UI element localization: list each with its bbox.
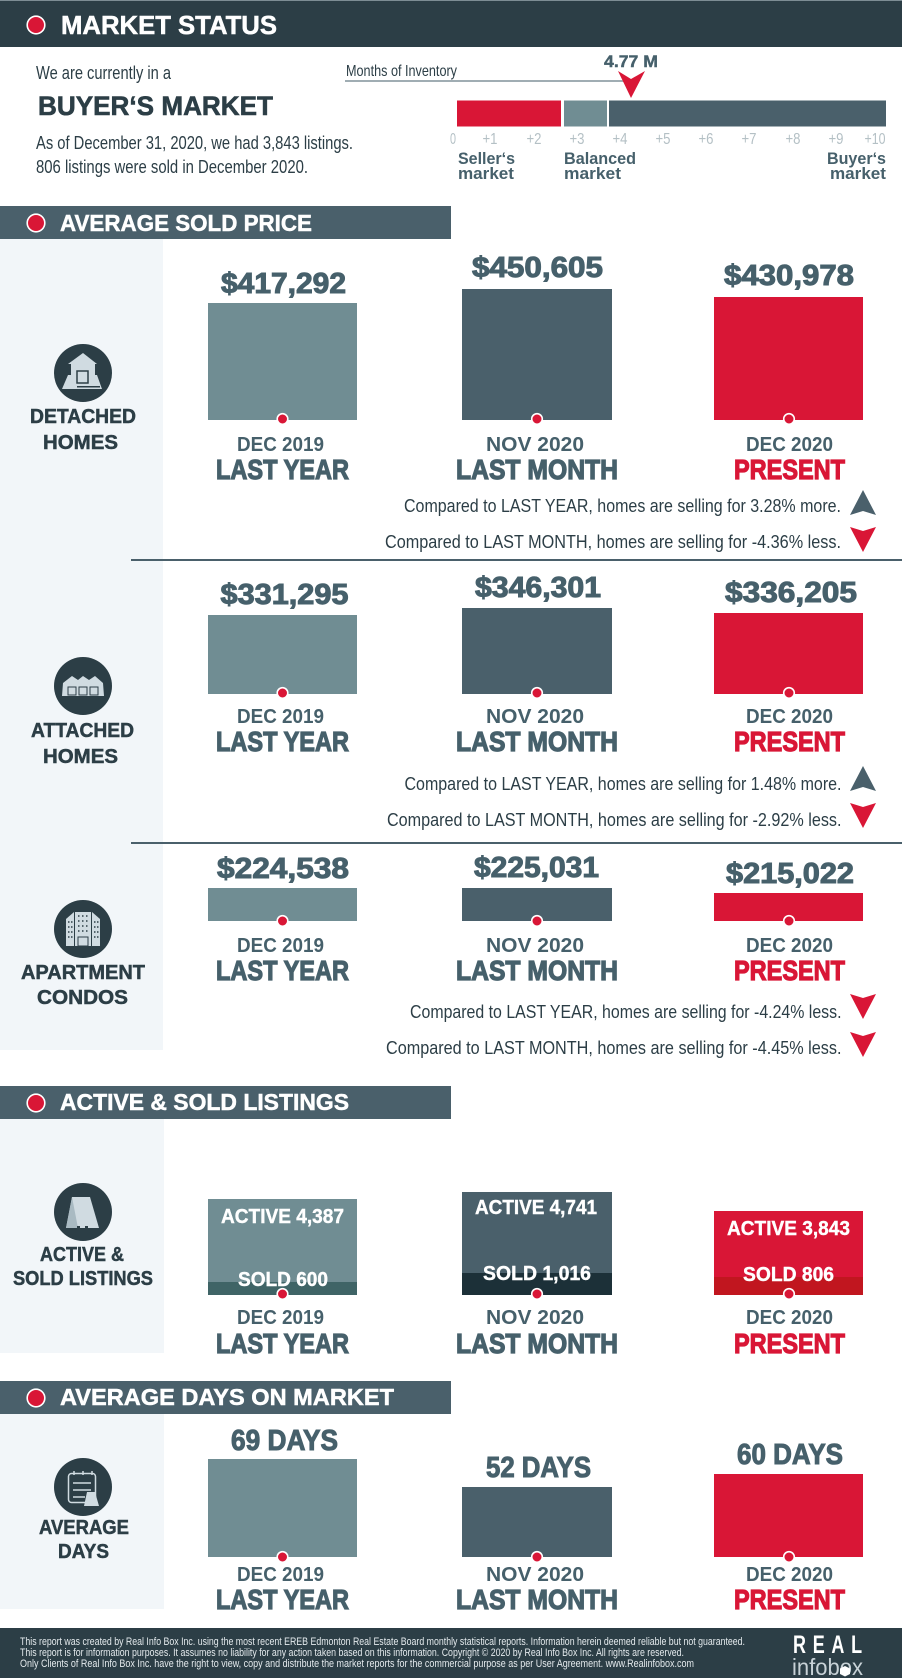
logo: real infobox bbox=[792, 1630, 863, 1680]
bar: apartment present bbox=[714, 858, 863, 986]
bar: listings present: PRESENT bbox=[734, 1328, 845, 1359]
text: disclaimer: Only Clients of Real Info Box Inc. have the right to view, copy and distribute the market reports for the commercial purpose as per User Agreement. www.Realinfobox.com bbox=[20, 1658, 694, 1670]
panel: active and sold listings bbox=[13, 1183, 863, 1359]
bar: listings last year bbox=[208, 1199, 357, 1359]
icon: sold sign bbox=[54, 1183, 112, 1241]
bar: attached last year bbox=[208, 579, 357, 757]
heading: average days on market: AVERAGE DAYS ON MARKET bbox=[60, 1384, 395, 1410]
bar: listings present: DEC 2020 bbox=[746, 1307, 833, 1329]
chart: months of inventory scale: +3 bbox=[570, 131, 584, 148]
label: active and sold listings bbox=[13, 1243, 153, 1290]
bar: listings last year: LAST YEAR bbox=[216, 1328, 349, 1359]
bar: days last year: DEC 2019 bbox=[237, 1564, 324, 1586]
bar: attached present: $336,205 bbox=[725, 577, 857, 609]
bar: attached present: PRESENT bbox=[734, 726, 845, 757]
text: market summary: 806 listings were sold in December 2020. bbox=[36, 157, 308, 177]
bar: detached last month bbox=[456, 252, 618, 485]
chart: months of inventory scale: market bbox=[458, 164, 514, 183]
chart: months of inventory scale: 4.77 M bbox=[604, 52, 658, 71]
bar: days last month: NOV 2020 bbox=[486, 1564, 584, 1586]
bar: apartment last year bbox=[208, 853, 357, 986]
bar: listings last year: DEC 2019 bbox=[237, 1307, 324, 1329]
callout: apartment comparison to last month: Compared to LAST MONTH, homes are selling for -4.45% less. bbox=[386, 1037, 842, 1058]
bar: listings last month bbox=[456, 1192, 618, 1359]
chart: months of inventory scale: Months of Inventory bbox=[346, 63, 457, 80]
bar: attached last month: $346,301 bbox=[475, 572, 601, 604]
bar: days last year: LAST YEAR bbox=[216, 1584, 349, 1615]
bar: apartment last month: LAST MONTH bbox=[456, 955, 618, 986]
bar: attached present bbox=[714, 577, 863, 757]
bar: apartment last year: $224,538 bbox=[217, 853, 349, 885]
panel: left column, days on market bbox=[0, 1414, 164, 1609]
text: disclaimer bbox=[20, 1636, 745, 1670]
panel: detached homes bbox=[30, 252, 876, 552]
bar: days last year bbox=[208, 1425, 357, 1615]
bar: attached last month bbox=[456, 572, 618, 757]
bar: detached present: DEC 2020 bbox=[746, 434, 833, 456]
chart: months of inventory scale: +2 bbox=[526, 131, 542, 148]
bar: days last year: 69 DAYS bbox=[231, 1425, 338, 1457]
chart: months of inventory scale: +10 bbox=[864, 131, 886, 148]
bar: attached last month: NOV 2020 bbox=[486, 706, 584, 728]
bar: days last month bbox=[456, 1452, 618, 1615]
footer bbox=[0, 1628, 902, 1680]
chart: months of inventory scale: Buyer‘s bbox=[827, 149, 886, 168]
bar: apartment last year: LAST YEAR bbox=[216, 955, 349, 986]
chart: months of inventory scale: +5 bbox=[656, 131, 670, 148]
bar: attached last year: $331,295 bbox=[220, 579, 349, 611]
chart: months of inventory scale: market bbox=[830, 164, 886, 183]
logo: real infobox: REAL bbox=[793, 1630, 862, 1659]
label: detached homes bbox=[30, 405, 136, 454]
panel: market status bbox=[0, 0, 902, 183]
text: market summary: We are currently in a bbox=[36, 63, 172, 83]
bar: detached last month: LAST MONTH bbox=[456, 454, 618, 485]
bar: detached last month: NOV 2020 bbox=[486, 434, 584, 456]
label: average days bbox=[39, 1516, 129, 1563]
text: market summary: As of December 31, 2020, we had 3,843 listings. bbox=[36, 133, 353, 153]
text: disclaimer: This report was created by Real Info Box Inc. using the most recent EREB Edmonton Real Estate Board monthly statistical reports. Information herein deemed reliable but not guaranteed. bbox=[20, 1636, 745, 1648]
chart: months of inventory scale: Seller‘s bbox=[458, 149, 515, 168]
panel: left column, sold price bbox=[0, 239, 163, 1050]
label: attached homes: HOMES bbox=[43, 745, 118, 768]
chart: months of inventory scale: +4 bbox=[612, 131, 628, 148]
bar: detached last year: DEC 2019 bbox=[237, 434, 324, 456]
label: apartment condos: APARTMENT bbox=[21, 961, 145, 984]
chart: months of inventory scale: +7 bbox=[742, 131, 756, 148]
bar: days present: PRESENT bbox=[734, 1584, 845, 1615]
icon: attached homes bbox=[54, 657, 112, 715]
chart: months of inventory scale bbox=[345, 52, 886, 183]
icon: notepad bbox=[54, 1458, 112, 1516]
callout: detached comparison to last year: Compared to LAST YEAR, homes are selling for 3.28% more. bbox=[404, 495, 841, 516]
label: detached homes: HOMES bbox=[43, 431, 118, 454]
bar: detached present: $430,978 bbox=[724, 260, 854, 292]
header: market status bbox=[0, 0, 902, 47]
bar: detached last year: LAST YEAR bbox=[216, 454, 349, 485]
bar: apartment last year: DEC 2019 bbox=[237, 935, 324, 957]
bar: days present: 60 DAYS bbox=[737, 1439, 843, 1471]
bar: detached last month: $450,605 bbox=[472, 252, 603, 284]
bar: listings last month: SOLD 1,016 bbox=[483, 1263, 591, 1285]
chart: months of inventory scale: 0 bbox=[450, 131, 456, 148]
heading: active and sold listings: ACTIVE & SOLD LISTINGS bbox=[60, 1089, 349, 1115]
bar: apartment last month: NOV 2020 bbox=[486, 935, 584, 957]
bar: listings present bbox=[714, 1211, 863, 1359]
label: active and sold listings: SOLD LISTINGS bbox=[13, 1267, 153, 1290]
bar: listings last year: ACTIVE 4,387 bbox=[221, 1206, 344, 1228]
label: attached homes bbox=[31, 719, 134, 768]
bar: apartment present: $215,022 bbox=[726, 858, 854, 890]
label: apartment condos bbox=[21, 961, 145, 1009]
label: apartment condos: CONDOS bbox=[37, 986, 128, 1009]
chart: months of inventory scale: +9 bbox=[828, 131, 844, 148]
logo: real infobox: infobox bbox=[792, 1654, 863, 1680]
bar: apartment last month bbox=[456, 852, 618, 986]
bar: attached present: DEC 2020 bbox=[746, 706, 833, 728]
callout: detached comparison to last month: Compared to LAST MONTH, homes are selling for -4.36% less. bbox=[385, 531, 841, 552]
bar: detached last year: $417,292 bbox=[221, 268, 346, 300]
icon: detached house bbox=[54, 344, 112, 402]
bar: attached last year: LAST YEAR bbox=[216, 726, 349, 757]
bar: days present: DEC 2020 bbox=[746, 1564, 833, 1586]
bar: attached last year: DEC 2019 bbox=[237, 706, 324, 728]
heading: average days on market bbox=[0, 1381, 451, 1414]
bar: detached last year bbox=[208, 268, 357, 485]
label: average days: DAYS bbox=[58, 1540, 109, 1563]
heading: average sold price: AVERAGE SOLD PRICE bbox=[60, 210, 312, 236]
bar: listings last month: LAST MONTH bbox=[456, 1328, 618, 1359]
text: disclaimer: This report is for information purposes. It assumes no liability for any action taken based on this information. Copyright © 2020 by Real Info Box Inc. All rights are reserved. bbox=[20, 1647, 684, 1659]
chart: months of inventory scale: Balanced bbox=[564, 149, 636, 168]
bar: listings present: SOLD 806 bbox=[743, 1264, 834, 1286]
callout: attached comparison to last month: Compared to LAST MONTH, homes are selling for -2.92% less. bbox=[387, 809, 842, 830]
heading: active and sold listings bbox=[0, 1086, 451, 1119]
label: average days: AVERAGE bbox=[39, 1516, 129, 1539]
text: market summary: BUYER‘S MARKET bbox=[38, 91, 273, 121]
header: market status: MARKET STATUS bbox=[61, 10, 277, 40]
bar: days present bbox=[714, 1439, 863, 1615]
callout: apartment comparison to last year: Compared to LAST YEAR, homes are selling for -4.24% less. bbox=[410, 1001, 842, 1022]
bar: listings last year: SOLD 600 bbox=[238, 1269, 328, 1291]
bar: listings last month: NOV 2020 bbox=[486, 1307, 584, 1329]
bar: listings last month: ACTIVE 4,741 bbox=[475, 1197, 597, 1219]
bar: apartment last month: $225,031 bbox=[474, 852, 599, 884]
bar: days last month: 52 DAYS bbox=[486, 1452, 591, 1484]
label: active and sold listings: ACTIVE & bbox=[40, 1243, 124, 1266]
bar: apartment present: DEC 2020 bbox=[746, 935, 833, 957]
chart: months of inventory scale: +1 bbox=[482, 131, 498, 148]
label: attached homes: ATTACHED bbox=[31, 719, 134, 742]
panel: apartment condos bbox=[21, 852, 876, 1058]
chart: months of inventory scale: market bbox=[564, 164, 621, 183]
chart: months of inventory scale: +8 bbox=[786, 131, 800, 148]
bar: detached present: PRESENT bbox=[734, 454, 845, 485]
panel: attached homes bbox=[31, 572, 876, 830]
bar: days last month: LAST MONTH bbox=[456, 1584, 618, 1615]
callout: attached comparison to last year: Compared to LAST YEAR, homes are selling for 1.48% more. bbox=[404, 773, 842, 794]
icon: apartment building bbox=[54, 900, 112, 958]
panel: average days bbox=[39, 1425, 863, 1615]
bar: attached last month: LAST MONTH bbox=[456, 726, 618, 757]
panel: left column, listings bbox=[0, 1119, 164, 1353]
text: market summary bbox=[36, 63, 353, 177]
bar: detached present bbox=[714, 260, 863, 485]
heading: average sold price bbox=[0, 206, 451, 239]
bar: listings present: ACTIVE 3,843 bbox=[727, 1218, 850, 1240]
label: detached homes: DETACHED bbox=[30, 405, 136, 428]
chart: months of inventory scale: +6 bbox=[698, 131, 714, 148]
bar: apartment present: PRESENT bbox=[734, 955, 845, 986]
